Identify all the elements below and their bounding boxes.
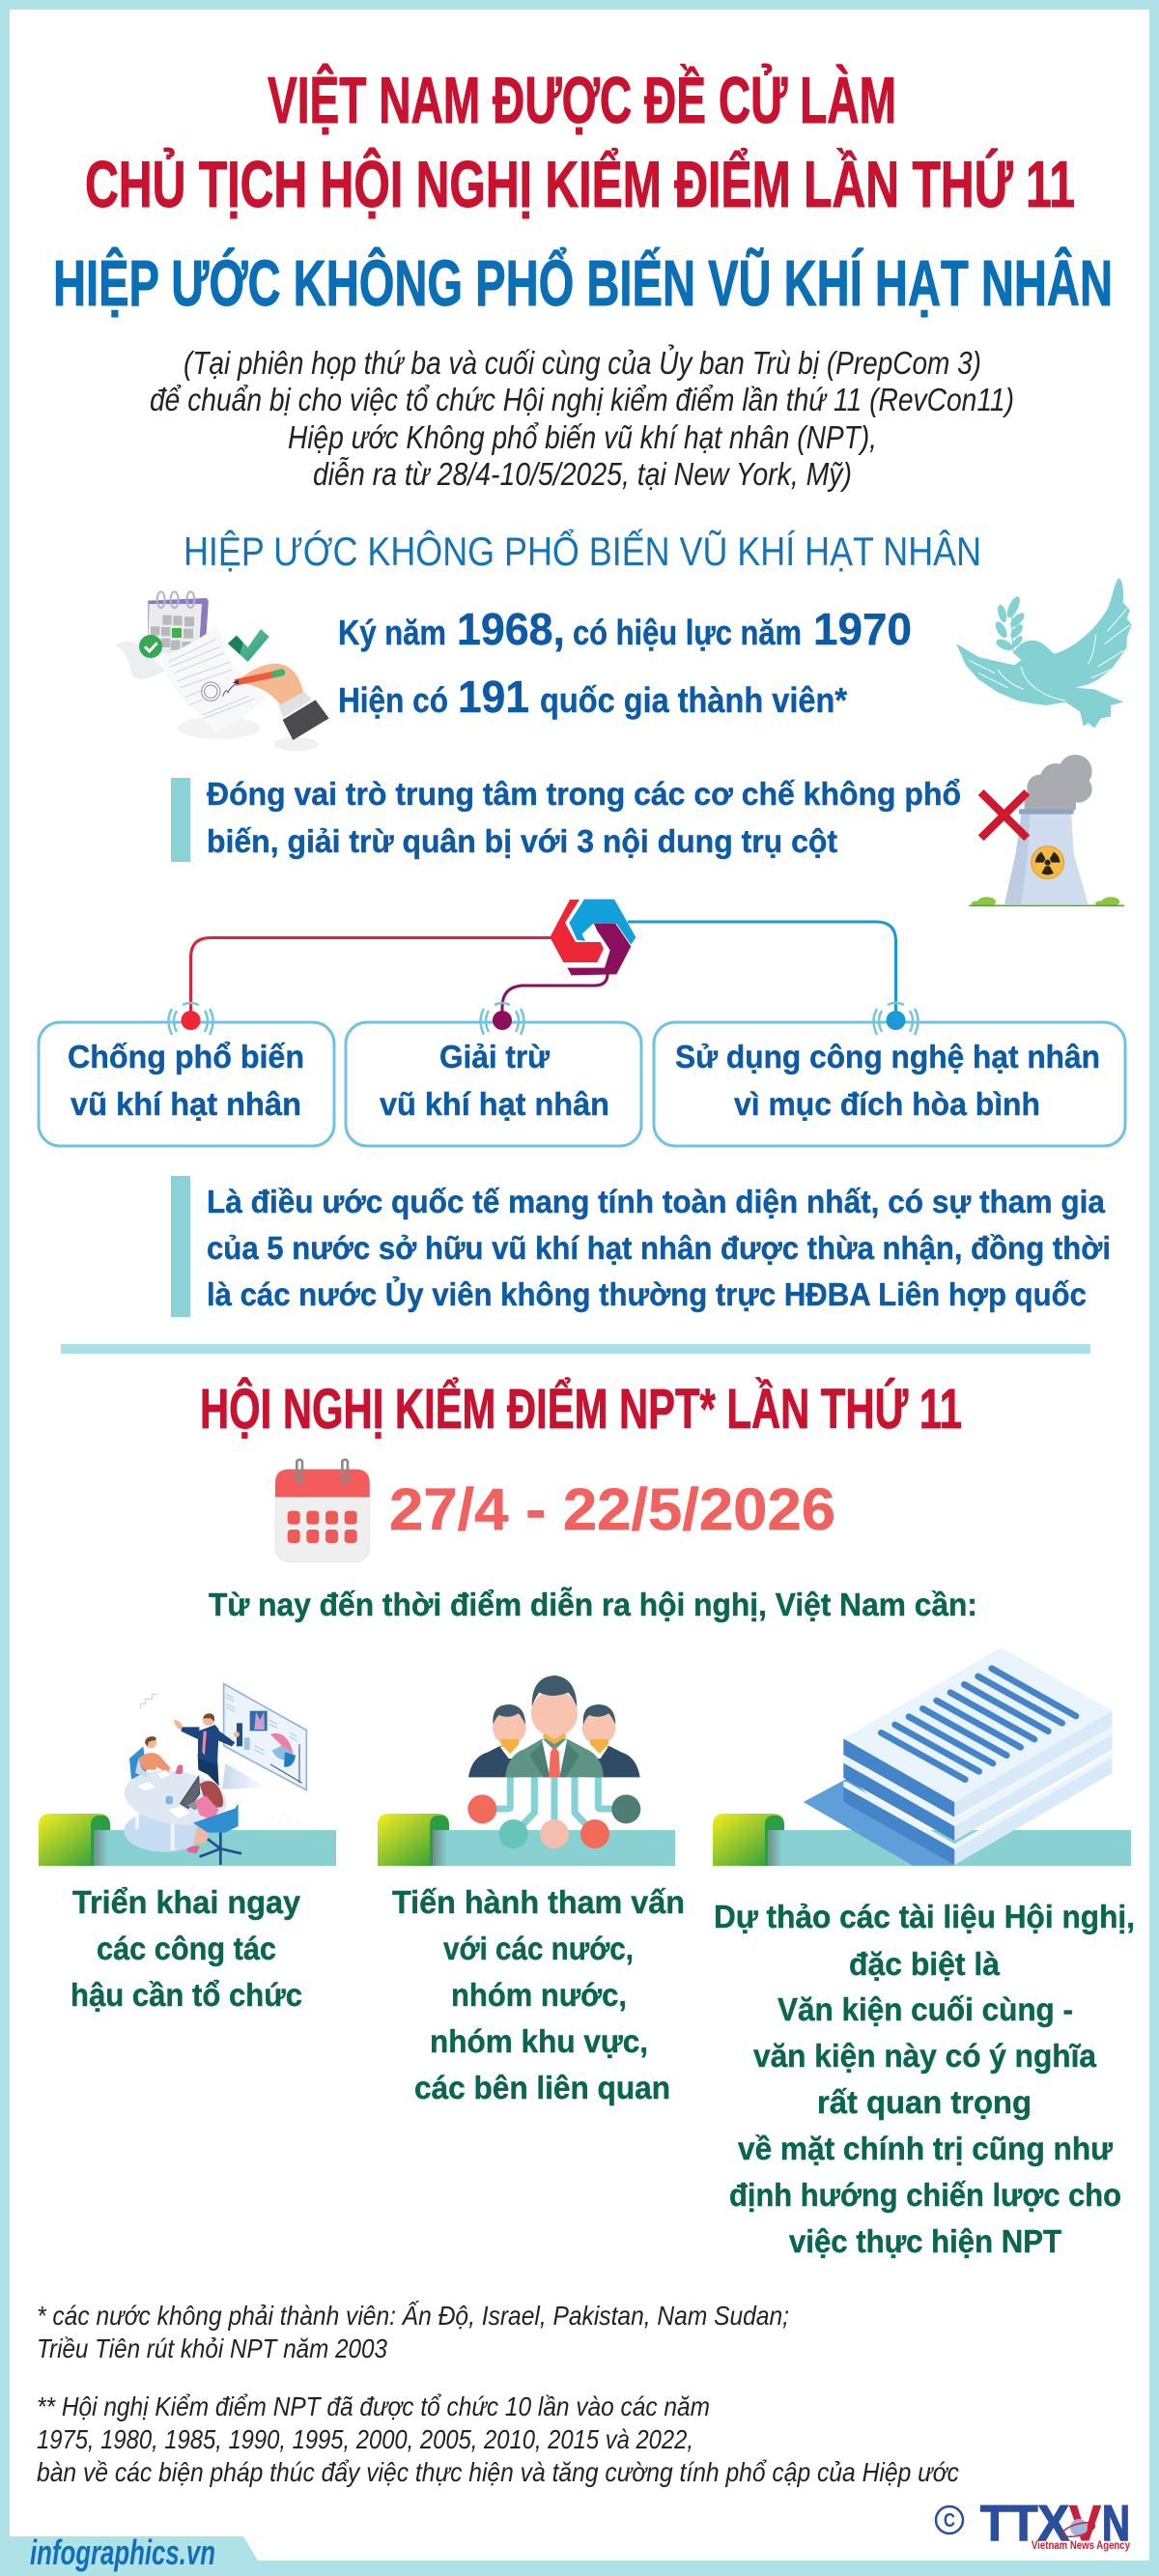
panel: peaceful use xyxy=(654,1022,1125,1146)
text: consultation task: Tiến hành tham vấn xyxy=(392,1884,685,1920)
icon: delegates network xyxy=(467,1675,640,1848)
members: Hiện có xyxy=(338,680,448,720)
panel: non-proliferation: Chống phổ biến xyxy=(68,1039,304,1074)
footer tab: infographics.vn xyxy=(30,2533,215,2572)
section heading: treaty: HIỆP ƯỚC KHÔNG PHỔ BIẾN VŨ KHÍ HẠT NHÂN xyxy=(184,527,981,574)
members xyxy=(338,672,847,722)
conference dates: 27/4 - 22/5/2026 xyxy=(389,1476,835,1542)
callout: comprehensive treaty: của 5 nước sở hữu vũ khí hạt nhân được thừa nhận, đồng thời xyxy=(207,1230,1111,1266)
text: logistics task: các công tác xyxy=(97,1931,276,1966)
icon: signing document xyxy=(116,591,329,751)
callout: central role: Đóng vai trò trung tâm trong các cơ chế không phổ xyxy=(207,776,961,812)
subtitle: diễn ra từ 28/4-10/5/2025, tại New York, Mỹ) xyxy=(313,456,852,492)
stats xyxy=(338,604,912,722)
signed and in force: Ký năm xyxy=(338,613,446,652)
text: consultation task xyxy=(392,1884,685,2105)
text: drafting task: Văn kiện cuối cùng - xyxy=(777,1991,1073,2027)
panel: peaceful use: Sử dụng công nghệ hạt nhân xyxy=(675,1039,1100,1074)
panel: disarmament: vũ khí hạt nhân xyxy=(380,1086,609,1122)
ribbon: task 1 xyxy=(39,1814,336,1866)
icon: calendar xyxy=(275,1460,370,1562)
panel: disarmament xyxy=(346,1022,641,1146)
red dot xyxy=(168,1003,212,1035)
footnotes: bàn về các biện pháp thúc đẩy việc thực hiện và tăng cường tính phổ cập của Hiệp ước xyxy=(37,2457,959,2487)
icon: stack of documents xyxy=(804,1647,1113,1866)
text: consultation task: nhóm khu vực, xyxy=(430,2023,648,2059)
text: drafting task: định hướng chiến lược cho xyxy=(729,2177,1121,2213)
text: logistics task: Triển khai ngay xyxy=(72,1884,301,1920)
panel: disarmament: Giải trừ xyxy=(439,1039,550,1074)
logo: TTXVN xyxy=(936,2496,1130,2552)
text: drafting task: đặc biệt là xyxy=(849,1946,1001,1982)
subtitle: (Tại phiên họp thứ ba và cuối cùng của Ủy ban Trù bị (PrepCom 3) xyxy=(184,344,981,381)
footnotes: ** Hội nghị Kiểm điểm NPT đã được tổ chức 10 lần vào các năm xyxy=(37,2391,710,2421)
connector dots xyxy=(168,1003,918,1035)
callout: comprehensive treaty: là các nước Ủy viên không thường trực HĐBA Liên hợp quốc xyxy=(207,1276,1087,1312)
ribbon: task 3 xyxy=(713,1814,1131,1866)
footnotes: Triều Tiên rút khỏi NPT năm 2003 xyxy=(37,2333,387,2363)
logo: TTXVN: C xyxy=(944,2510,955,2532)
blue dot xyxy=(873,1003,918,1035)
text: logistics task xyxy=(71,1884,302,2013)
icon: meeting xyxy=(121,1684,306,1865)
subheading: Vietnam needs: Từ nay đến thời điểm diễn ra hội nghị, Việt Nam cần: xyxy=(209,1587,977,1622)
text: drafting task: văn kiện này có ý nghĩa xyxy=(753,2038,1097,2074)
connector lines xyxy=(191,922,896,1020)
logo: TTXVN: N xyxy=(1102,2496,1130,2552)
ribbon: task 2 xyxy=(378,1814,675,1866)
subtitle xyxy=(150,344,1014,492)
icon: three-part hexagon xyxy=(550,900,636,975)
signed and in force: có hiệu lực năm xyxy=(573,613,802,652)
callout: central role: biến, giải trừ quân bị với 3 nội dung trụ cột xyxy=(207,823,837,859)
text: consultation task: nhóm nước, xyxy=(451,1977,627,2013)
text: logistics task: hậu cần tổ chức xyxy=(71,1977,302,2013)
text: drafting task: rất quan trọng xyxy=(817,2084,1032,2120)
footer tab xyxy=(0,2533,1159,2576)
logo: TTXVN: Vietnam News Agency xyxy=(1032,2538,1130,2552)
signed and in force: 1968, xyxy=(457,604,565,654)
footnotes xyxy=(37,2301,959,2487)
panel: non-proliferation: vũ khí hạt nhân xyxy=(71,1086,301,1122)
callout: comprehensive treaty: Là điều ước quốc tế mang tính toàn diện nhất, có sự tham gia xyxy=(207,1184,1106,1219)
members: 191 xyxy=(458,672,529,722)
text: drafting task: về mặt chính trị cũng như xyxy=(738,2131,1113,2166)
purple dot xyxy=(481,1003,523,1035)
signed and in force: 1970 xyxy=(813,604,912,654)
footnotes: * các nước không phải thành viên: Ấn Độ, Israel, Pakistan, Nam Sudan; xyxy=(37,2301,789,2331)
text: consultation task: các bên liên quan xyxy=(414,2070,670,2105)
logo: TTXVN: TTX xyxy=(980,2496,1069,2552)
signed and in force xyxy=(338,604,912,654)
title xyxy=(53,63,1113,320)
subtitle: Hiệp ước Không phổ biến vũ khí hạt nhân (NPT), xyxy=(288,419,877,455)
panel: non-proliferation xyxy=(39,1022,334,1146)
callout: comprehensive treaty xyxy=(171,1176,1111,1317)
text: drafting task: việc thực hiện NPT xyxy=(789,2223,1061,2259)
text: consultation task: với các nước, xyxy=(443,1931,634,1966)
callout: central role xyxy=(171,776,961,862)
text: drafting task xyxy=(714,1899,1135,2259)
members: quốc gia thành viên* xyxy=(540,680,847,720)
subtitle: để chuẩn bị cho việc tổ chức Hội nghị kiểm điểm lần thứ 11 (RevCon11) xyxy=(150,382,1014,417)
icon: peace dove xyxy=(956,578,1132,728)
icon: nuclear cooling tower crossed out xyxy=(969,755,1124,906)
footnotes: 1975, 1980, 1985, 1990, 1995, 2000, 2005, 2010, 2015 và 2022, xyxy=(37,2424,693,2454)
logo: TTXVN: V xyxy=(1069,2496,1101,2552)
panel: peaceful use: vì mục đích hòa bình xyxy=(734,1086,1040,1122)
text: drafting task: Dự thảo các tài liệu Hội nghị, xyxy=(714,1899,1135,1934)
